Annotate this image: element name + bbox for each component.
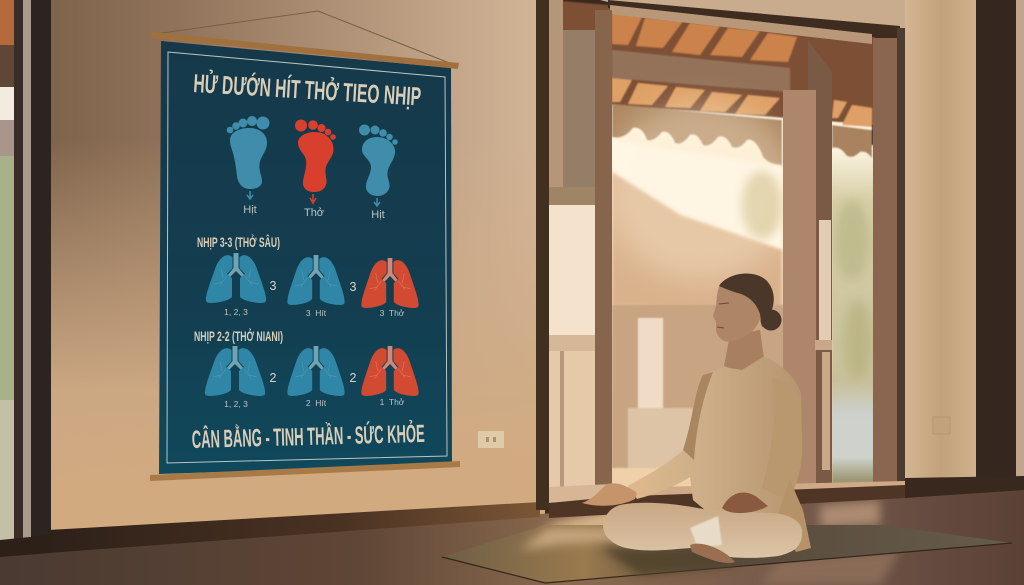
poster: inner border [167,52,447,463]
lungs row 2: blue 1 [205,346,265,396]
woman meditating [582,273,811,563]
temple base [628,408,720,470]
woman: left hand [582,483,637,506]
poster: top rod [152,32,459,69]
arrow: right foot [374,198,380,206]
label: 1,2,3 row 1: 1, 2, 3 [224,307,248,317]
window: outdoor view [550,0,875,490]
eave scalloped valance [612,104,782,166]
woman: shirt [628,357,802,520]
number: 2 left: 2 [270,371,277,385]
number: 2 right: 2 [350,371,357,385]
woman: legs [603,503,802,558]
window: right door leaf [808,40,832,485]
lungs row 1: blue 1 [206,253,266,303]
right dark column [905,0,1024,498]
sky bright centre [612,140,782,250]
heading: rhythm 2-2: NHỊP 2-2 (THỞ NIANI) [194,327,283,344]
arrow: red foot [310,194,316,203]
window: left door leaf [549,0,612,503]
wall socket right [933,417,950,434]
woman: foot [690,544,735,563]
woman: shirt tail [776,480,811,552]
icon: right foot blue [359,124,398,196]
label: 1 Thở: 1 Thở [380,397,405,407]
roof tiles upper [612,13,797,62]
label: Hít 2: Hịt [371,209,385,221]
window: top frame [608,0,900,44]
label: 2 Hít: 2 Hít [306,398,327,408]
roof tiles lower [612,78,872,127]
temple pillar [638,318,663,410]
lungs row 1: red [361,258,419,308]
hanging string [155,11,457,66]
number: 3 left: 3 [270,279,277,293]
yoga mat [442,525,1012,583]
baseboard: left wall [48,502,540,553]
lungs row 1: blue 2 [287,255,345,305]
woman: face [713,281,762,342]
poster footer slogan: CÂN BẰNG - TINH THẦN - SỨC KHỎE [191,418,425,454]
wall: above window [600,0,905,30]
floor [0,484,1024,585]
woman: left shoulder shade [683,372,713,460]
tree at centre right [742,171,782,239]
wall: right wall [895,0,1024,500]
temple roof [612,172,782,310]
outlet [478,431,504,448]
lungs row 2: red [361,346,419,396]
wall: main left wall [0,0,545,560]
woman: right hand [722,493,768,513]
poster [150,32,460,481]
woman: lap fold shadow [690,516,722,548]
poster: bottom rod [150,461,460,481]
poster title: HỬ DƯỚN HÍT THỞ TIEO NHỊP [193,67,422,112]
heading: rhythm 3-3: NHỊP 3-3 (THỞ SÂU) [197,233,280,250]
label: 1,2,3 row 2: 1, 2, 3 [224,399,248,409]
window: outer frame [536,0,905,510]
arrow: left foot [247,191,253,199]
woman: neck [724,330,764,372]
floor light reflections [545,500,900,585]
poster: background [159,41,452,474]
roof underside [550,0,875,125]
icon: red foot [295,120,336,192]
lungs row 2: blue 2 [287,346,345,396]
left window [0,0,51,557]
woman: right sleeve [762,378,802,500]
eave right [832,125,872,158]
temple wall [612,305,784,485]
tree and garden right [832,145,874,485]
woman: hair [719,273,774,327]
woman: hair bun [760,310,782,330]
label: 3 Thở: 3 Thở [380,308,405,318]
window: sill [549,481,905,518]
window: column [783,90,816,486]
number: 3 right: 3 [350,280,357,294]
woman: face features [717,303,729,328]
label: Hít 1: Hịt [243,204,257,216]
label: 3 Hít: 3 Hít [306,308,327,318]
icon: left foot blue [227,116,270,189]
haze over window opening [605,100,795,280]
roof beam [612,50,790,92]
label: Thở: Thở [304,207,324,219]
